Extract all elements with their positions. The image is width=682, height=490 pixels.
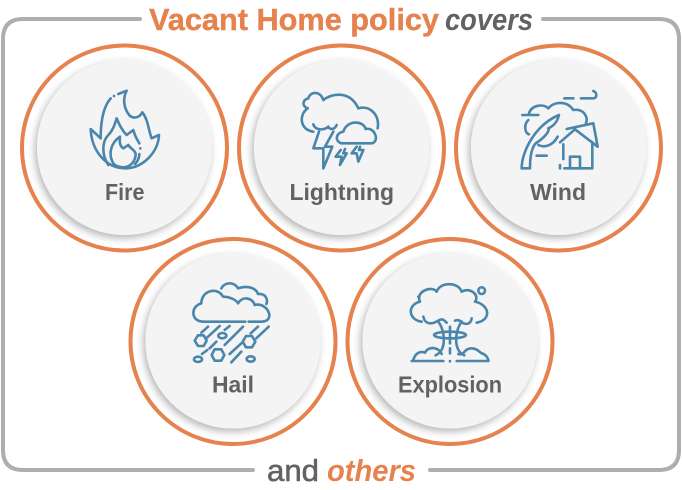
icon: wind — [522, 91, 598, 168]
panel: explosion — [348, 239, 552, 444]
panel: hail — [130, 239, 336, 444]
label: Wind — [530, 179, 586, 205]
icon: fire — [91, 91, 159, 168]
panel: lightning — [239, 46, 444, 250]
icon: explosion — [411, 284, 488, 361]
icon: hail — [193, 283, 269, 362]
panel: fire — [22, 46, 227, 250]
footer text — [267, 453, 416, 488]
icon: lightning — [302, 93, 378, 168]
panel: wind — [456, 46, 661, 250]
title: covers — [445, 2, 533, 37]
label: Explosion — [398, 372, 502, 398]
label: Lightning — [290, 179, 394, 205]
title: Vacant Home policy — [149, 2, 440, 37]
label: Hail — [212, 372, 254, 398]
footer text: others — [327, 453, 416, 488]
footer text: and — [267, 453, 319, 488]
label: Fire — [105, 179, 144, 205]
